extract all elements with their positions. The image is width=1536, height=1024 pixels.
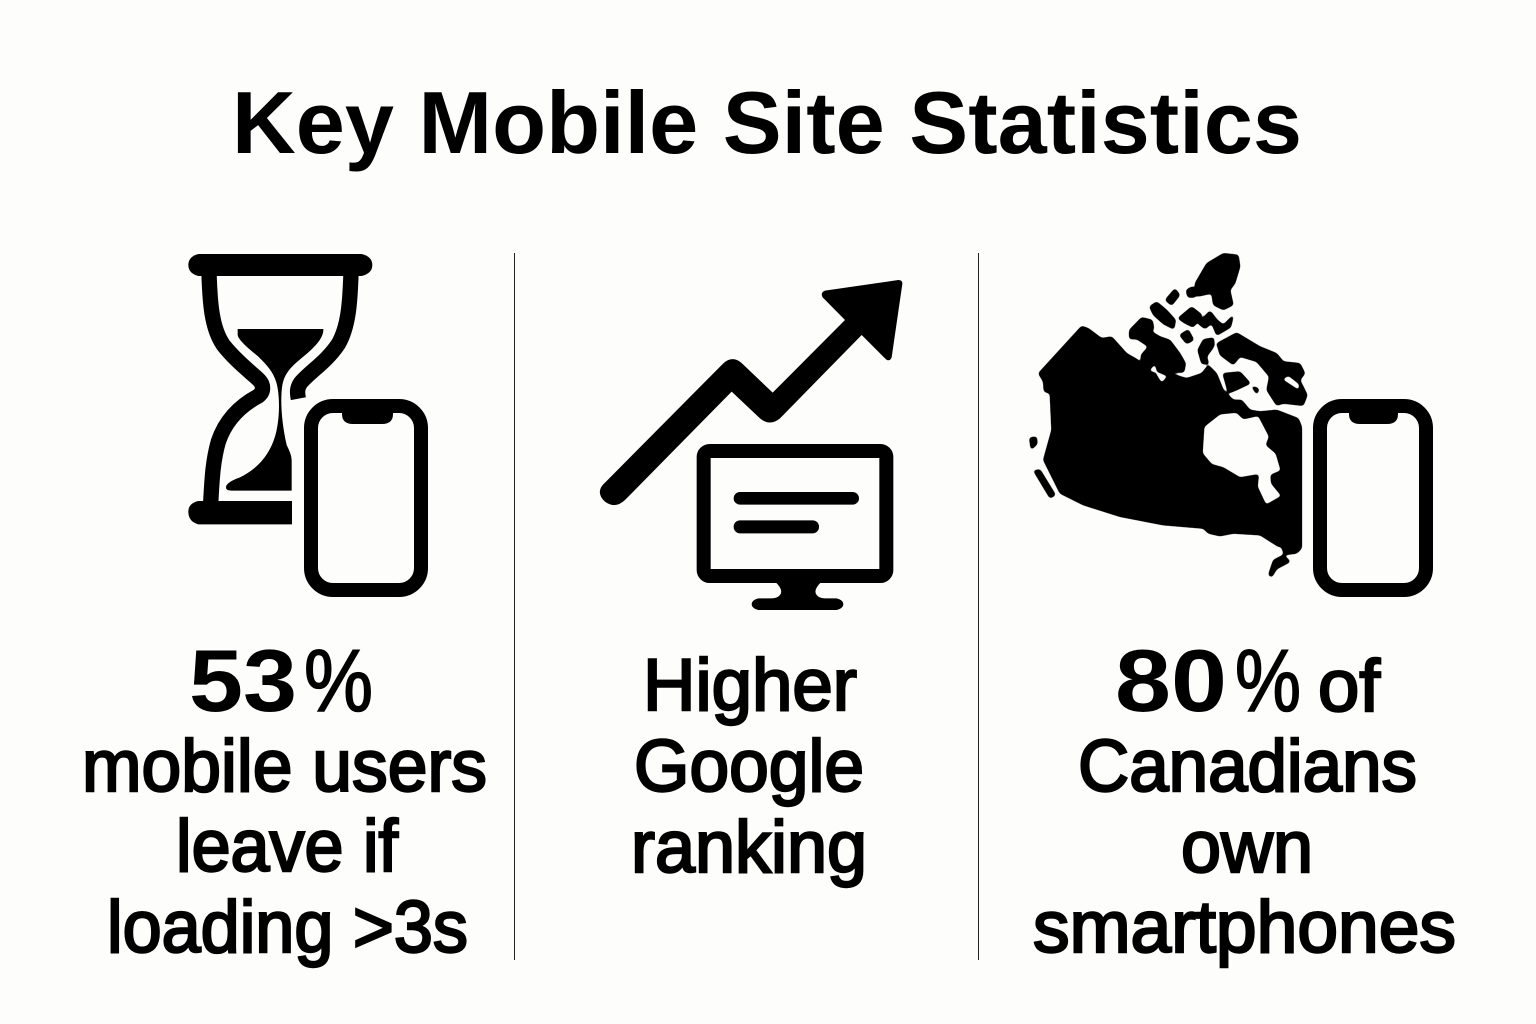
text: higher Google ranking xyxy=(631,645,867,888)
panel: Google ranking xyxy=(600,280,902,888)
icon: rising arrow xyxy=(600,280,902,505)
text: mobile users leave if loading over 3s xyxy=(82,726,487,968)
stat: 80% of: of xyxy=(1318,646,1381,727)
icon: smartphone xyxy=(311,406,421,590)
text: higher Google ranking: Higher xyxy=(643,645,857,726)
title: Key Mobile Site Statistics xyxy=(232,73,1302,172)
text: Canadians own smartphones: smartphones xyxy=(1033,887,1456,968)
stat: 80% of: % xyxy=(1235,631,1301,730)
text: higher Google ranking: ranking xyxy=(631,807,867,888)
text: Canadians own smartphones xyxy=(1033,726,1456,968)
icon: smartphone xyxy=(1320,406,1426,590)
icon: map of Canada xyxy=(1029,253,1308,577)
text: mobile users leave if loading over 3s: loading >3s xyxy=(107,887,468,968)
panel: Canadian smartphone ownership xyxy=(1020,240,1456,968)
text: Canadians own smartphones: Canadians xyxy=(1078,726,1417,807)
stat: 80% of xyxy=(1115,631,1381,730)
text: Canadians own smartphones: own xyxy=(1181,807,1313,888)
text: higher Google ranking: Google xyxy=(634,726,864,807)
stat: 53%: % xyxy=(304,631,373,730)
stat: 53%: 53 xyxy=(189,631,297,730)
text: mobile users leave if loading over 3s: mobile users xyxy=(82,726,487,807)
icon: monitor xyxy=(704,451,886,610)
icon: hourglass xyxy=(188,254,372,524)
stat: 53% xyxy=(189,631,373,730)
text: mobile users leave if loading over 3s: leave if xyxy=(176,806,399,887)
panel: page load abandonment xyxy=(82,254,487,968)
stat: 80% of: 80 xyxy=(1115,631,1227,730)
